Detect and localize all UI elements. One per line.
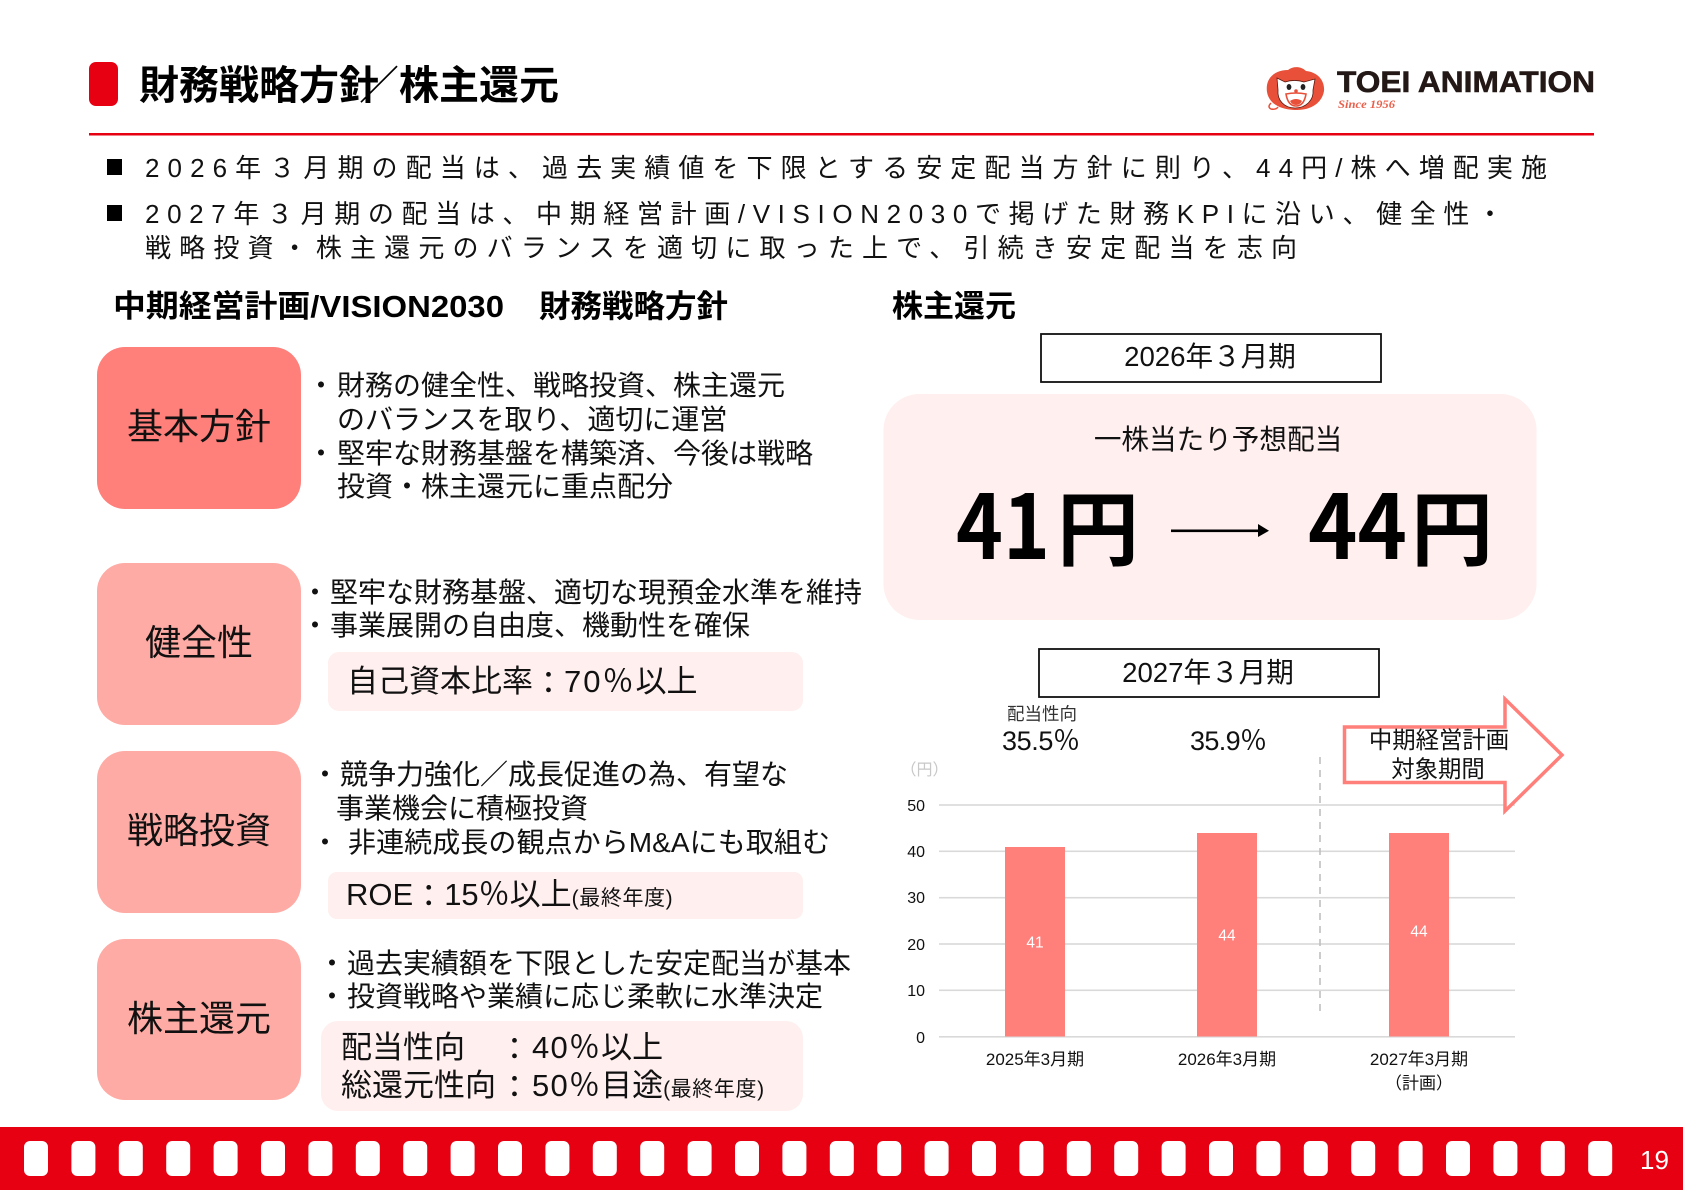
soundness text: 事業展開の自由度、機動性を確保: [330, 610, 750, 641]
payout ratio caption: 配当性向: [1007, 704, 1077, 724]
KPI box: payout ratios: 総還元性向: [341, 1068, 496, 1103]
investment text: 非連続成長の観点からM&Aにも取組む: [348, 827, 830, 858]
KPI box: payout ratios: ：: [499, 1070, 530, 1105]
investment text: 競争力強化／成長促進の為、有望な: [340, 759, 788, 790]
KPI box: equity ratio: 70％: [564, 664, 635, 699]
policy text: [307, 370, 813, 502]
y axis labels: 20: [907, 937, 925, 954]
period label: FY2026: [1041, 334, 1381, 382]
value: 44 yen: [1308, 456, 1493, 585]
policy text: 堅牢な財務基盤を構築済、今後は戦略: [337, 438, 813, 469]
soundness text: ・: [301, 577, 329, 608]
y axis labels: 30: [907, 890, 925, 907]
period label: FY2027: 2027年３月期: [1122, 657, 1294, 688]
footer film strip: [0, 1127, 1683, 1190]
label box: strategic investment: [97, 751, 301, 913]
value: 41 yen: [956, 456, 1139, 585]
KPI box: payout ratios: [321, 1021, 803, 1111]
bar: FY2027 plan: 44: [1410, 924, 1428, 940]
policy text: のバランスを取り、適切に運営: [337, 404, 727, 435]
label box: basic policy: [97, 347, 301, 509]
chart gridlines: [939, 804, 1515, 1038]
bar: FY2026: [1197, 833, 1257, 1036]
y axis labels: 0: [916, 1030, 925, 1047]
return text: ・: [318, 981, 346, 1012]
arrow: mid-term plan period: 対象期間: [1391, 756, 1485, 782]
KPI box: payout ratios: 40％: [532, 1030, 601, 1065]
KPI box: equity ratio: 以上: [635, 664, 697, 699]
bullet marker 1: [107, 159, 122, 175]
bullet list: summary: [107, 153, 1547, 263]
panel: basic policy: [97, 347, 813, 509]
title marker: [89, 62, 118, 106]
investment text: [311, 759, 830, 858]
dividend caption: 一株当たり予想配当: [1094, 424, 1342, 455]
bar: FY2025: 41: [1026, 934, 1044, 952]
title text: 財務戦略方針: [139, 64, 379, 108]
value: 44 yen: 44: [1308, 456, 1407, 585]
investment text: ・: [311, 827, 339, 858]
bullet text 1: 2026年３月期の配当は、過去実績値を下限とする安定配当方針に則り、44円/株へ増配実施: [145, 153, 1547, 183]
label: strategic investment: 戦略投資: [127, 810, 271, 851]
title text: ／: [359, 64, 399, 108]
investment text: 事業機会に積極投資: [336, 793, 588, 824]
y axis labels: 40: [907, 844, 925, 861]
payout ratio FY2025: 35.5％: [1002, 726, 1080, 756]
KPI box: equity ratio: 自己資本比率: [347, 664, 533, 699]
label box: soundness: [97, 563, 301, 725]
header rule: [89, 133, 1594, 136]
bullet text 2 line 2: 戦略投資・株主還元のバランスを適切に取った上で、引続き安定配当を志向: [145, 233, 1297, 263]
return text: 投資戦略や業績に応じ柔軟に水準決定: [347, 981, 823, 1012]
KPI box: payout ratios: 配当性向: [341, 1030, 465, 1065]
policy text: ・: [307, 370, 335, 401]
title bar: [89, 62, 559, 108]
payout ratio FY2026: 35.9％: [1190, 726, 1267, 756]
soundness text: 堅牢な財務基盤、適切な現預金水準を維持: [330, 577, 862, 608]
KPI box: ROE: (最終年度): [572, 887, 673, 910]
KPI box: ROE: 15％以上: [444, 877, 572, 912]
arrow: mid-term plan period: [1344, 699, 1562, 811]
policy text: 投資・株主還元に重点配分: [337, 471, 673, 502]
logo wordmark: TOEI ANIMATION: [1337, 66, 1595, 99]
y axis unit: （円）: [900, 761, 949, 779]
policy text: ・: [307, 438, 335, 469]
heading: financial strategy: 財務戦略方針: [539, 288, 728, 324]
label: shareholder return: 株主還元: [127, 998, 271, 1039]
panel: dividend forecast: [884, 394, 1536, 620]
KPI box: payout ratios: 以上: [601, 1030, 663, 1065]
value: 41 yen: 41: [956, 456, 1050, 585]
title text: 株主還元: [399, 64, 559, 108]
heading: financial strategy: 中期経営計画/VISION2030: [113, 289, 504, 324]
forecast divider: [1319, 757, 1321, 1015]
KPI box: equity ratio: ：: [533, 666, 564, 701]
KPI box: ROE: ROE: [346, 877, 413, 912]
x axis labels: 2026年3月期: [1178, 1050, 1276, 1069]
KPI box: payout ratios: ：: [499, 1032, 530, 1067]
payout ratio row: [1002, 704, 1267, 756]
film perforations: [24, 1141, 1612, 1176]
icon: mascot cat in red hat: [1267, 67, 1324, 110]
bar: FY2026: 44: [1218, 928, 1236, 944]
panel: strategic investment: [97, 751, 830, 919]
label: basic policy: 基本方針: [127, 406, 271, 447]
KPI box: equity ratio: [328, 652, 803, 711]
KPI box: ROE: ：: [413, 879, 444, 914]
logo: Toei Animation: [1267, 66, 1595, 111]
label: soundness: 健全性: [145, 622, 253, 663]
bar chart: dividend per share: [900, 757, 1515, 1093]
x axis labels: 2027年3月期: [1370, 1050, 1468, 1069]
panel: soundness: [97, 563, 862, 725]
y axis labels: 10: [907, 983, 925, 1000]
panel: shareholder return policy: [97, 939, 851, 1111]
bar: FY2025: [1005, 847, 1065, 1036]
return text: 過去実績額を下限とした安定配当が基本: [347, 948, 851, 979]
policy text: 財務の健全性、戦略投資、株主還元: [337, 370, 785, 401]
soundness text: ・: [301, 610, 329, 641]
page number: 19: [1640, 1145, 1669, 1175]
arrow label: 中期経営計画: [1369, 727, 1509, 753]
KPI box: payout ratios: 目途(最終年度): [601, 1068, 765, 1103]
y axis labels: [907, 798, 925, 1047]
KPI box: payout ratios: 50％: [532, 1068, 601, 1103]
soundness text: [301, 577, 862, 641]
label box: shareholder return: [97, 939, 301, 1100]
value: 41 yen: 円: [1057, 464, 1139, 583]
logo tagline: Since 1956: [1338, 97, 1395, 111]
heading: shareholder return: 株主還元: [892, 289, 1016, 324]
x axis labels: [986, 1050, 1468, 1093]
period label: FY2026: 2026年３月期: [1124, 341, 1296, 372]
return text: [318, 948, 851, 1012]
arrow: dividend increase: [1171, 524, 1269, 537]
x axis labels: 2025年3月期: [986, 1050, 1084, 1069]
heading: financial strategy: [113, 288, 728, 324]
bar: FY2027 plan: [1389, 833, 1449, 1036]
return text: ・: [318, 948, 346, 979]
bullet text 2 line 1: 2027年３月期の配当は、中期経営計画/VISION2030で掲げた財務KPIに沿い、健全性・: [145, 199, 1503, 229]
KPI box: ROE: [328, 872, 803, 919]
investment text: ・: [311, 759, 339, 790]
value: 44 yen: 円: [1411, 464, 1493, 583]
y axis labels: 50: [907, 798, 925, 815]
period label: FY2027: [1039, 649, 1379, 697]
x axis labels: （計画）: [1385, 1074, 1453, 1093]
bullet marker 2: [107, 205, 122, 221]
